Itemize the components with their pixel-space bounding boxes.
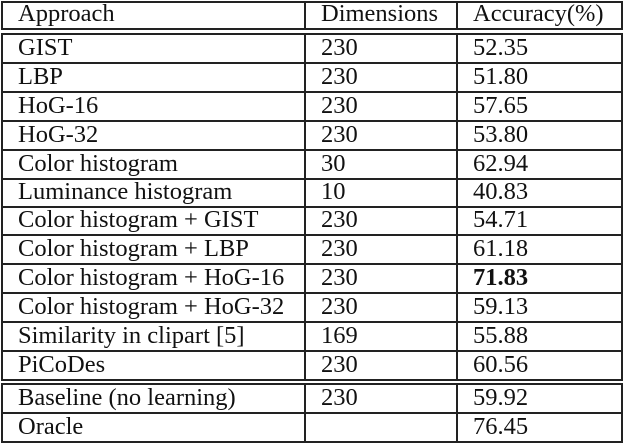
data rows: 60.56 bbox=[473, 351, 528, 378]
data rows: Color histogram + HoG-16 bbox=[18, 264, 284, 291]
data rows: Color histogram bbox=[18, 150, 178, 177]
data rows: HoG-32 bbox=[18, 121, 98, 148]
data rows: 230 bbox=[321, 384, 358, 411]
header row: Accuracy(%) bbox=[473, 0, 604, 27]
data rows: 61.18 bbox=[473, 235, 528, 262]
data rows: 230 bbox=[321, 92, 358, 119]
data rows: LBP bbox=[18, 63, 63, 90]
data rows: Color histogram + GIST bbox=[18, 206, 258, 233]
data rows: 40.83 bbox=[473, 178, 528, 205]
data rows: GIST bbox=[18, 34, 72, 61]
data rows: 10 bbox=[321, 178, 346, 205]
data rows: 59.13 bbox=[473, 293, 528, 320]
data rows: 76.45 bbox=[473, 413, 528, 440]
data rows: Baseline (no learning) bbox=[18, 384, 236, 411]
data rows: Similarity in clipart [5] bbox=[18, 322, 245, 349]
data rows: 57.65 bbox=[473, 92, 528, 119]
data rows: 52.35 bbox=[473, 34, 528, 61]
header row: Dimensions bbox=[321, 0, 438, 27]
data rows: Luminance histogram bbox=[18, 178, 232, 205]
data rows: 169 bbox=[321, 322, 358, 349]
data rows: Color histogram + LBP bbox=[18, 235, 249, 262]
data rows: 230 bbox=[321, 351, 358, 378]
data rows: 54.71 bbox=[473, 206, 528, 233]
data rows: 55.88 bbox=[473, 322, 528, 349]
data rows: 62.94 bbox=[473, 150, 528, 177]
data rows: Color histogram + HoG-32 bbox=[18, 293, 284, 320]
data rows: 71.83 bbox=[473, 264, 528, 291]
data rows: HoG-16 bbox=[18, 92, 98, 119]
data rows: 230 bbox=[321, 264, 358, 291]
data rows: 230 bbox=[321, 293, 358, 320]
header row bbox=[18, 0, 604, 27]
data rows: 53.80 bbox=[473, 121, 528, 148]
data rows: 59.92 bbox=[473, 384, 528, 411]
data rows: PiCoDes bbox=[18, 351, 105, 378]
data rows: 230 bbox=[321, 206, 358, 233]
data rows: 30 bbox=[321, 150, 346, 177]
data rows: 230 bbox=[321, 121, 358, 148]
data rows: 230 bbox=[321, 235, 358, 262]
data rows: 230 bbox=[321, 34, 358, 61]
data rows: Oracle bbox=[18, 413, 83, 440]
header row: Approach bbox=[18, 0, 115, 27]
data rows: 51.80 bbox=[473, 63, 528, 90]
data rows: 230 bbox=[321, 63, 358, 90]
